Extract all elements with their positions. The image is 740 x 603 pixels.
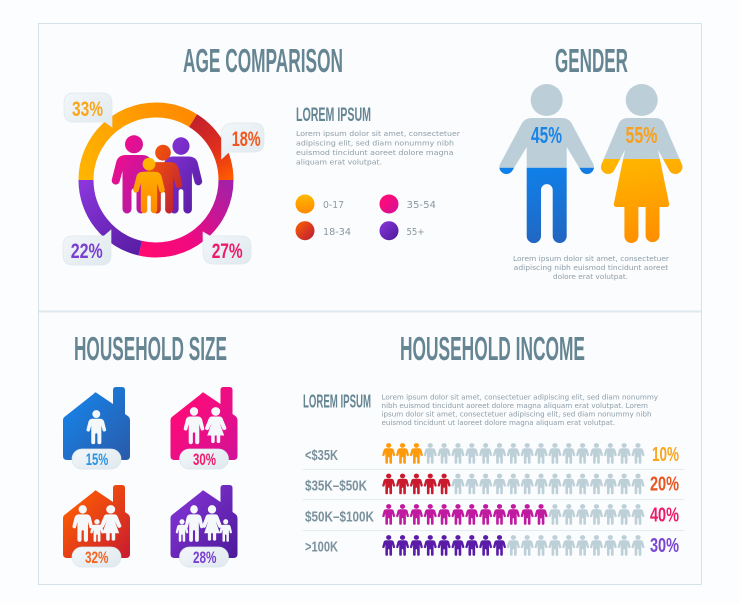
income row: 50K to 100K 40%: 40%: [650, 505, 679, 527]
text block: gender description: adipiscing nibh euismod tincidunt aoreet: [514, 263, 668, 272]
icon: family: [112, 135, 202, 214]
house: four people 28%: [170, 485, 238, 567]
subheading: lorem ipsum: LOREM IPSUM: [296, 105, 371, 126]
income row: over 100K 30%: [305, 535, 679, 557]
legend: 18-34: [323, 227, 351, 238]
heading: age comparison: AGE COMPARISON: [183, 42, 343, 79]
text block: age description: euismod tincidunt aoreet dolore magna: [296, 148, 454, 157]
text block: age description: adipiscing elit, sed diam nonummy nibh: [296, 138, 454, 148]
income row: over 100K 30%: 30%: [650, 535, 679, 557]
icon: woman 55%: [601, 84, 682, 243]
income row: under 35K 10%: 10%: [652, 444, 679, 466]
panel: age comparison: [63, 42, 461, 265]
callout: 27%: [203, 232, 251, 264]
callout: 33%: 33%: [72, 98, 103, 121]
income row: 35K to 50K 20%: $35K–$50K: [305, 478, 367, 495]
income row: 35K to 50K 20%: [305, 474, 679, 496]
income row: under 35K 10%: [305, 443, 679, 466]
panel: household income: [303, 330, 684, 557]
callout: 27%: 27%: [212, 240, 243, 263]
callout: 22%: [63, 230, 111, 265]
text block: income description: euismod tincidunt ut laoreet dolore magna aliquam erat volutpat.: [382, 418, 615, 427]
income row: over 100K 30%: >100K: [305, 539, 338, 556]
text block: gender description: [513, 254, 670, 281]
text block: income description: Lorem ipsum dolor sit amet, consectetuer adipiscing elit, sed diam nonummy: [382, 393, 659, 402]
house: two people 30%: 30%: [193, 450, 216, 469]
text block: age description: [296, 129, 461, 166]
heading: household size: HOUSEHOLD SIZE: [74, 330, 227, 367]
icon: man 45%: 45%: [531, 122, 562, 148]
income row: 35K to 50K 20%: 20%: [650, 474, 679, 496]
income row: 50K to 100K 40%: $50K–$100K: [305, 509, 374, 526]
text block: age description: aliquam erat volutpat.: [296, 158, 382, 166]
text block: age description: Lorem ipsum dolor sit amet, consectetuer: [296, 129, 461, 138]
legend: 55+: [406, 227, 424, 238]
callout: 22%: 22%: [71, 240, 103, 263]
text block: income description: nibh euismod tincidunt aoreet dolore magna aliquam erat volutpat. Lorem: [382, 401, 648, 410]
icon: man 45%: [499, 84, 594, 243]
panel: household size: [63, 330, 238, 567]
heading: gender: GENDER: [555, 42, 628, 79]
house: one person 15%: [63, 387, 130, 469]
legend: [296, 194, 436, 240]
callout: 18%: [222, 123, 264, 159]
income row: 50K to 100K 40%: [305, 504, 679, 527]
callout: 18%: 18%: [232, 128, 261, 151]
icon: woman 55%: 55%: [626, 122, 658, 148]
house: four people 28%: 28%: [193, 548, 216, 567]
house: one person 15%: 15%: [86, 450, 108, 469]
income row: under 35K 10%: <$35K: [305, 447, 338, 464]
house: three people 32%: [63, 485, 130, 567]
text block: gender description: dolore erat volutpat.: [553, 272, 628, 281]
legend: 35-54: [406, 200, 436, 211]
house: three people 32%: 32%: [85, 548, 108, 567]
panel: gender: [499, 42, 682, 281]
donut chart: [86, 110, 226, 250]
callout: 33%: [64, 93, 112, 127]
legend: 0-17: [323, 200, 344, 211]
house: two people 30%: [170, 387, 238, 469]
text block: gender description: Lorem ipsum dolor sit amet, consectetuer: [513, 254, 670, 263]
text block: income description: ipsum dolor sit amet, consectetuer adipiscing elit, sed diam nonummy nibh: [382, 410, 652, 419]
subheading: lorem ipsum: LOREM IPSUM: [303, 392, 371, 412]
text block: income description: [382, 393, 659, 427]
